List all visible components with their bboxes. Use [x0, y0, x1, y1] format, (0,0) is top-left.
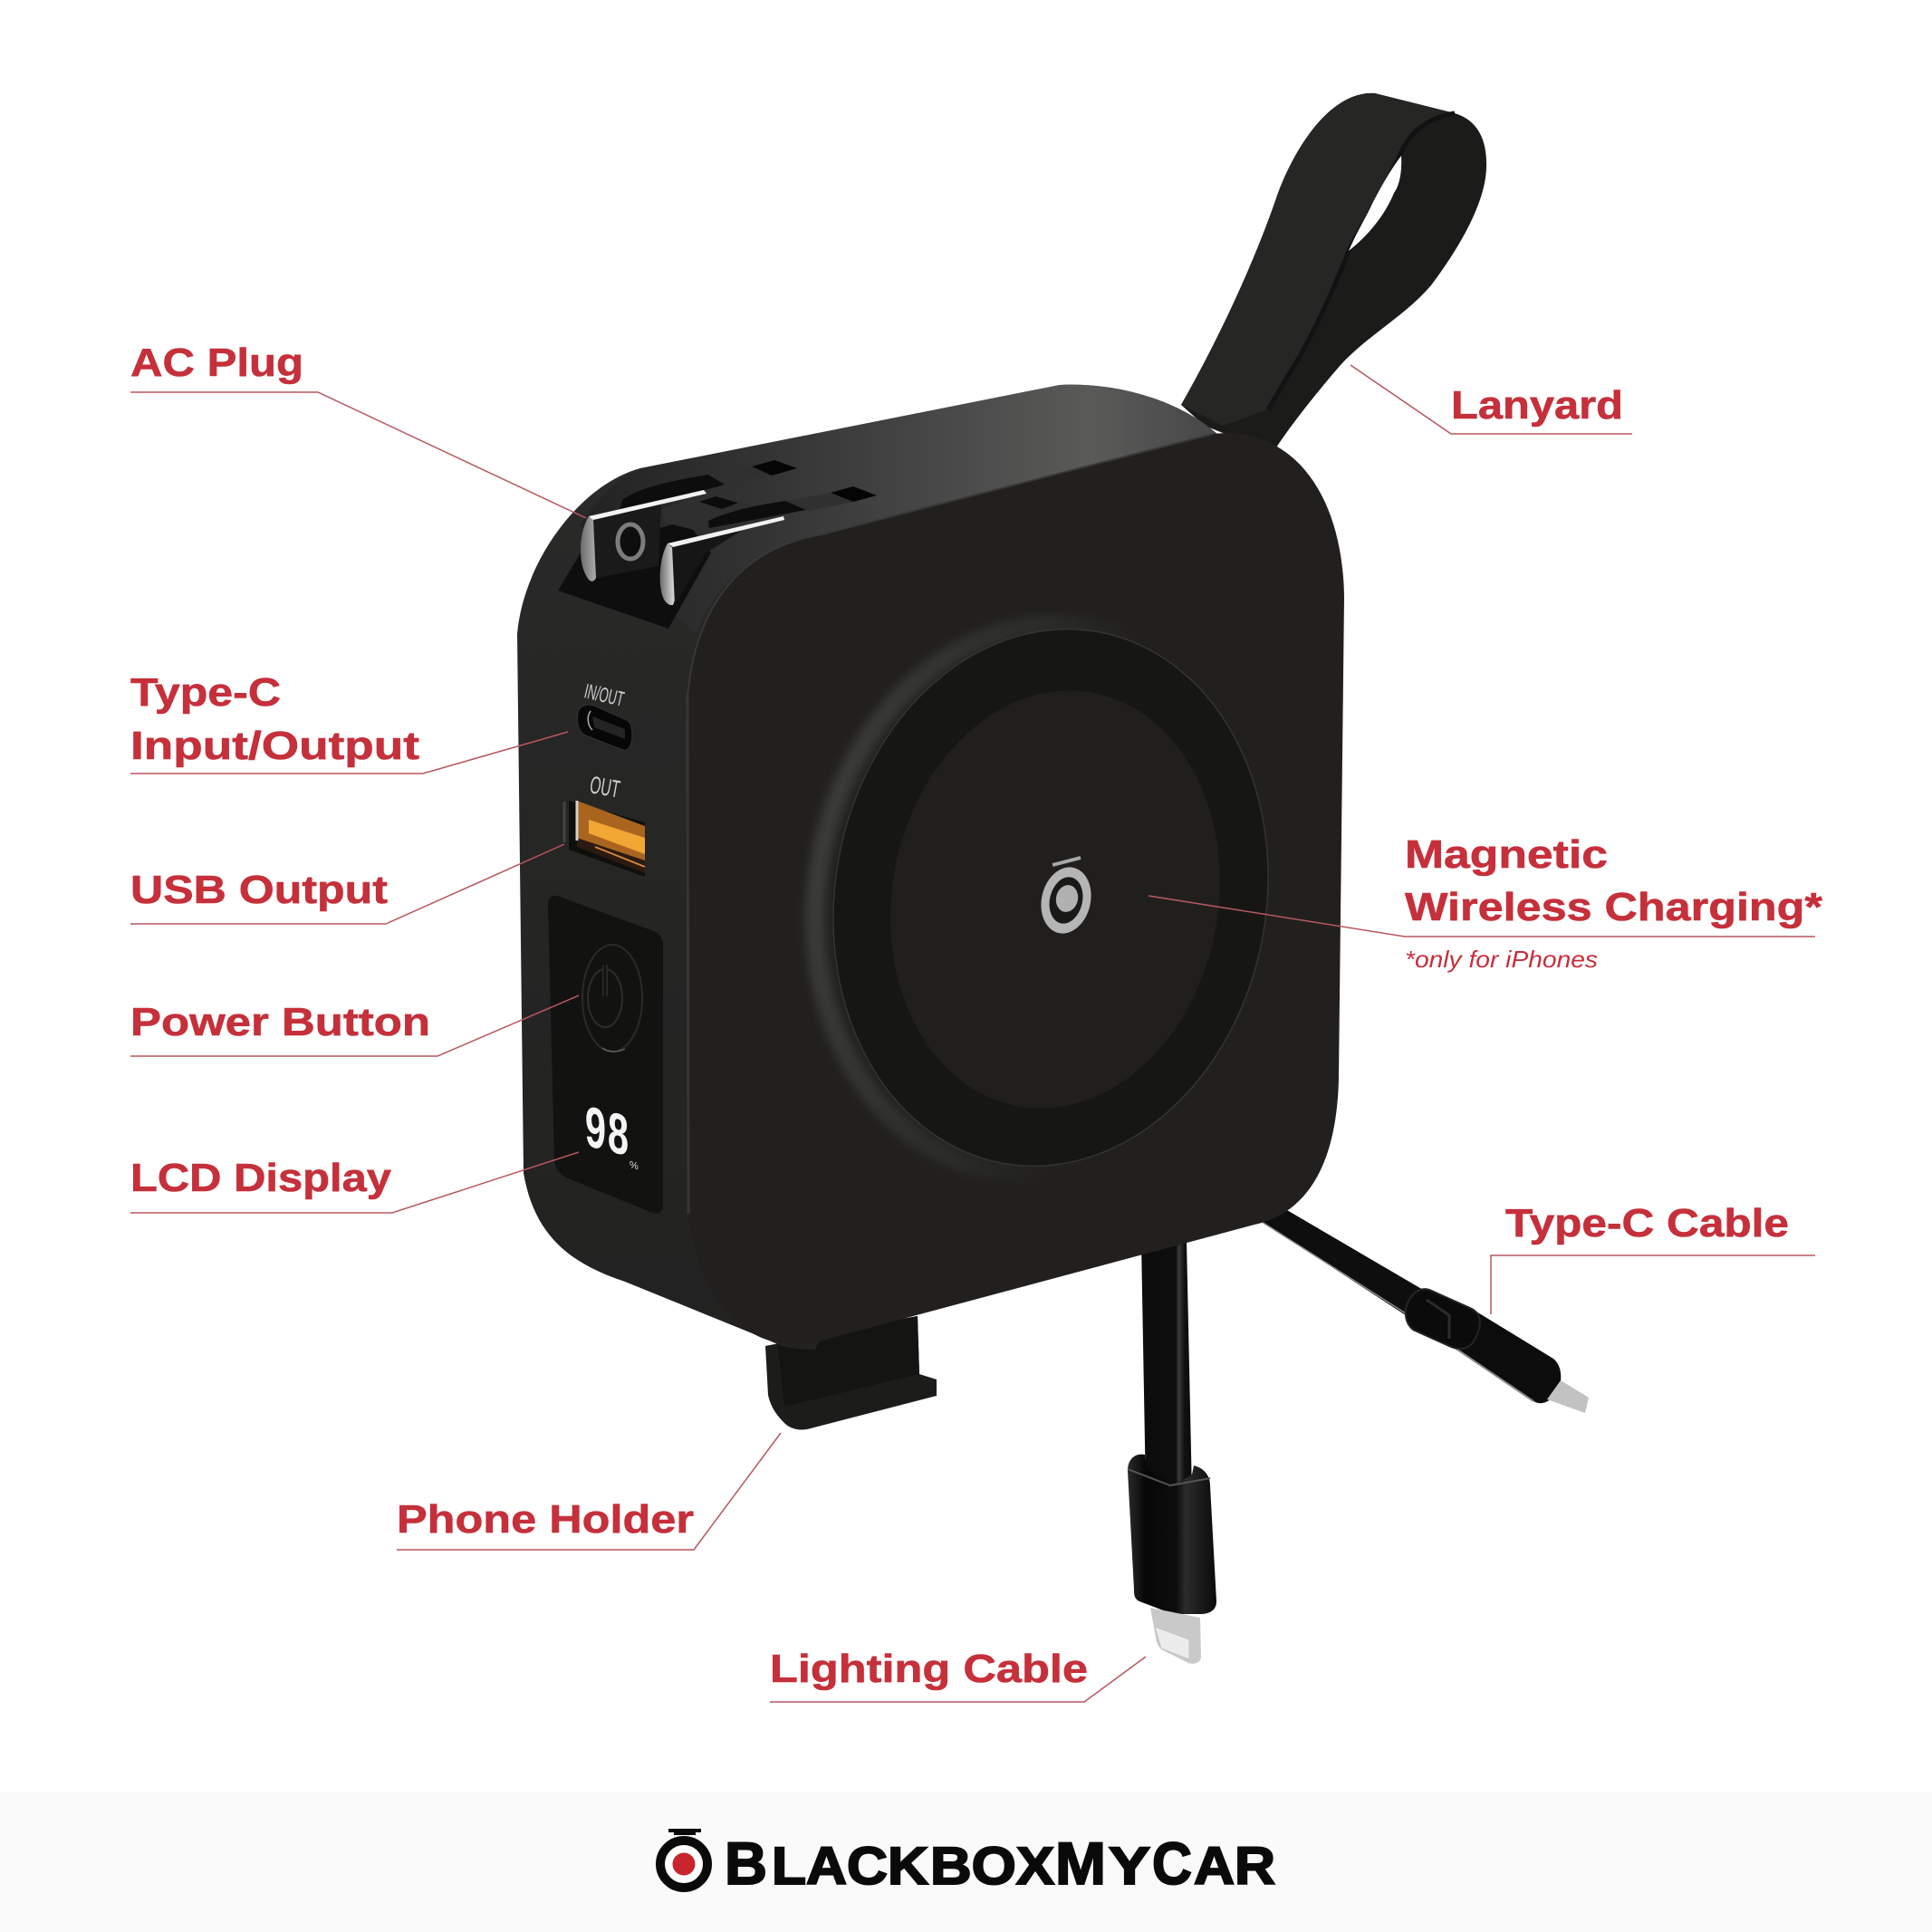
wireless charging dark ring [792, 594, 1310, 1201]
label: Magnetic Wireless Charging: Magnetic [1405, 832, 1608, 877]
label: Power Button: Power Button [130, 1000, 430, 1044]
icon: phone holder [765, 1316, 937, 1430]
icon: power button [582, 945, 642, 1052]
folded prong slots [619, 475, 725, 514]
label: Type-C Cable [1491, 1201, 1815, 1314]
label: Lanyard: Lanyard [1451, 383, 1623, 428]
label: Lighting Cable [770, 1647, 1146, 1702]
label: Phone Holder [397, 1433, 781, 1550]
logo wordmark: M [1055, 1830, 1106, 1897]
plug slots [752, 460, 797, 476]
label: Magnetic Wireless Charging [1149, 832, 1823, 973]
icon: lanyard strap [1181, 93, 1486, 453]
prong two [660, 543, 688, 605]
center logo [1034, 858, 1098, 938]
logo wordmark: C [1152, 1830, 1192, 1897]
logo wordmark: AR [1194, 1837, 1275, 1896]
logo wordmark: BOX [930, 1837, 1054, 1896]
lightning strip [1141, 1240, 1192, 1495]
port [577, 705, 632, 750]
logo wordmark: Y [1109, 1837, 1150, 1896]
type-c connector body [1455, 1309, 1561, 1403]
type-c metal tip [1547, 1380, 1589, 1413]
icon: usb port [564, 771, 645, 877]
power bank body [517, 385, 1344, 1350]
label: Type-C Input/Output: Input/Output [130, 724, 419, 768]
prong one [581, 507, 634, 582]
wireless charging rim glow [773, 589, 1307, 1208]
label: USB Output [130, 844, 564, 924]
plug recess [558, 521, 711, 629]
logo wordmark: B [725, 1830, 767, 1897]
label: Type-C Cable: Type-C Cable [1505, 1201, 1789, 1245]
icon: type-c cable [1258, 1204, 1589, 1413]
label: AC Plug: AC Plug [130, 341, 303, 385]
footer band [0, 1792, 1932, 1932]
label: USB Output: USB Output [130, 868, 388, 912]
logo wordmark [725, 1830, 1275, 1897]
icon: lightning cable [1128, 1240, 1216, 1664]
label: LCD Display: LCD Display [130, 1156, 392, 1200]
top face [580, 385, 1218, 634]
port frame [569, 801, 645, 877]
side silhouette [517, 385, 1218, 1350]
type-c clip [1406, 1289, 1480, 1349]
logo: BlackBoxMyCar [660, 1829, 1275, 1897]
control panel [548, 896, 663, 1214]
icon: type-c port [577, 679, 632, 750]
lightning collar edge [1128, 1469, 1210, 1485]
front face [687, 433, 1344, 1344]
label: Phone Holder: Phone Holder [397, 1497, 694, 1542]
lightning connector body [1128, 1455, 1216, 1614]
label: Type-C Input/Output [130, 670, 568, 774]
label: LCD Display [130, 1152, 579, 1213]
label: Lanyard [1350, 365, 1632, 434]
IN/OUT label: IN/OUT [582, 679, 627, 711]
type-c strip [1258, 1204, 1429, 1319]
LCD digits: 98 [584, 1096, 630, 1175]
label: Type-C Input/Output: Type-C [130, 670, 281, 715]
wireless charging inner disc [858, 664, 1253, 1135]
icon: AC plug [558, 460, 877, 629]
label: Magnetic Wireless Charging: Wireless Charging* [1405, 885, 1823, 929]
logo wordmark: LACK [772, 1837, 928, 1896]
label: Lighting Cable: Lighting Cable [770, 1647, 1088, 1691]
OUT label: OUT [588, 771, 622, 803]
orange tongue [589, 820, 645, 854]
lightning metal tip [1150, 1608, 1201, 1664]
logo icon [660, 1829, 707, 1888]
label: Power Button [130, 995, 579, 1056]
LCD percent: % [630, 1159, 639, 1172]
port interior [577, 801, 645, 871]
plug bridge [661, 495, 792, 534]
footnote: *only for iPhones [1405, 946, 1598, 973]
label: AC Plug [130, 341, 586, 518]
